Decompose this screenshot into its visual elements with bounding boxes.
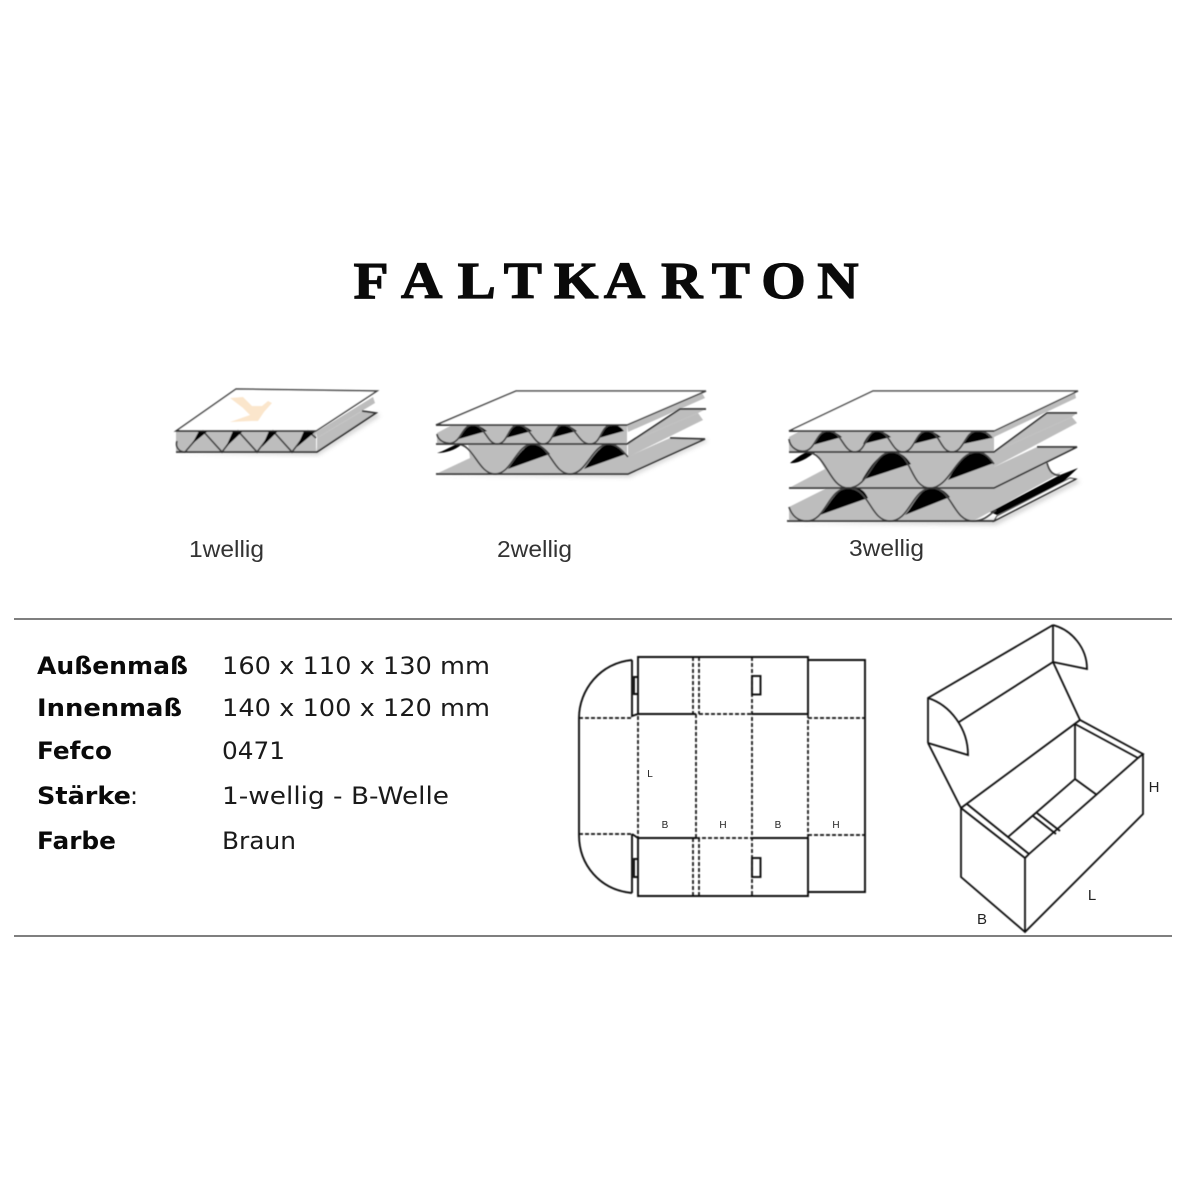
- diagram labels: flat blank dimensions: L: [647, 769, 653, 780]
- illustration: 3wellig corrugated board: [787, 391, 1080, 525]
- diagram labels: flat blank dimensions: B: [662, 820, 669, 831]
- illustration: 1wellig corrugated board: [176, 389, 380, 455]
- diagram labels: open box dimensions: [977, 779, 1159, 928]
- caption: 1wellig: 1wellig: [189, 536, 264, 562]
- spec: Farbe: Farbe: [37, 827, 116, 855]
- spec: Außenmaß: [37, 652, 490, 680]
- diagram labels: flat blank dimensions: B: [775, 820, 782, 831]
- diagram labels: flat blank dimensions: H: [719, 820, 727, 831]
- bottom rule: [14, 935, 1172, 937]
- spec: Fefco: 0471: [222, 737, 285, 765]
- spec: Stärke: Stärke: [37, 782, 131, 810]
- caption: 3wellig: 3wellig: [849, 535, 924, 561]
- title: FALTKARTON: [354, 251, 859, 309]
- diagram labels: open box dimensions: L: [1088, 887, 1096, 904]
- diagram: open box: [928, 625, 1143, 932]
- spec: Fefco: [37, 737, 285, 765]
- diagram labels: flat blank dimensions: [647, 769, 840, 831]
- spec: Stärke: 1-wellig - B-Welle: [222, 782, 449, 810]
- spec: Stärke: [37, 782, 449, 810]
- spec: Farbe: [37, 827, 296, 855]
- spec: Fefco: Fefco: [37, 737, 112, 765]
- spec: Stärke: :: [130, 782, 138, 810]
- spec: Farbe: Braun: [222, 827, 296, 855]
- diagram labels: flat blank dimensions: H: [832, 820, 840, 831]
- illustration: 2wellig corrugated board: [436, 391, 708, 477]
- diagram: flat box blank: [579, 657, 865, 896]
- diagram labels: open box dimensions: B: [977, 911, 987, 928]
- spec: Außenmaß: Außenmaß: [37, 652, 188, 680]
- spec: Außenmaß: 160 x 110 x 130 mm: [222, 652, 490, 680]
- caption: 2wellig: 2wellig: [497, 536, 572, 562]
- diagram labels: open box dimensions: H: [1149, 779, 1159, 796]
- spec table: [37, 652, 490, 855]
- spec: Innenmaß: 140 x 100 x 120 mm: [222, 694, 490, 722]
- spec: Innenmaß: Innenmaß: [37, 694, 182, 722]
- icon: bird watermark: [230, 397, 272, 422]
- top rule: [14, 618, 1172, 620]
- spec: Innenmaß: [37, 694, 490, 722]
